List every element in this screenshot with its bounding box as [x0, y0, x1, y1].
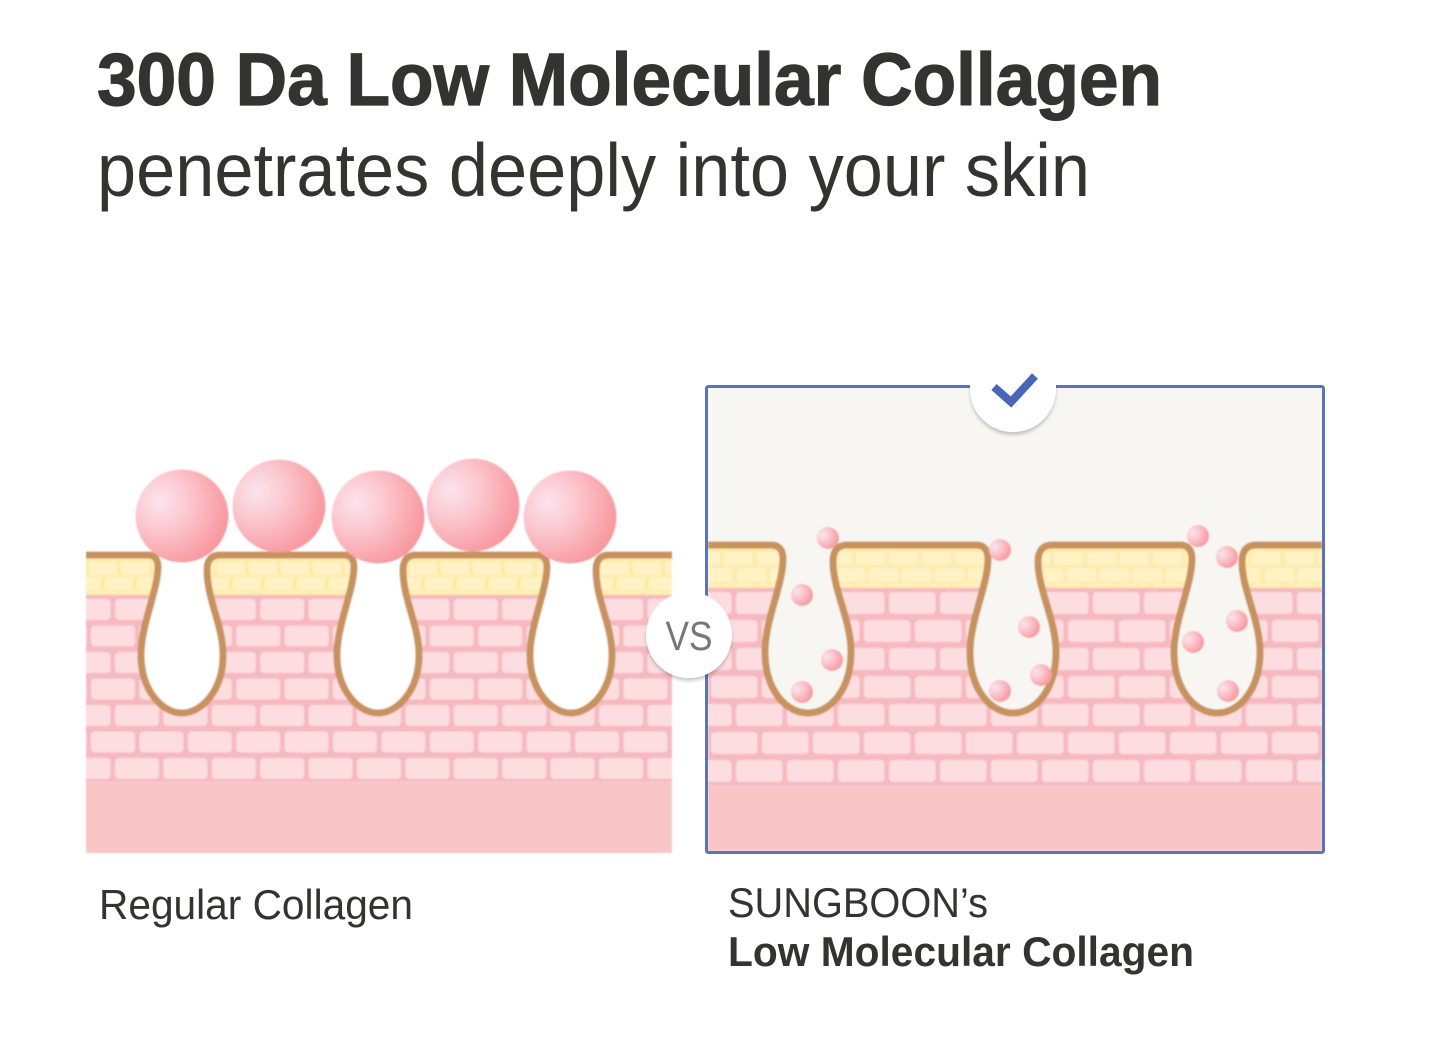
label line 2: Low Molecular Collagen [728, 928, 1194, 975]
title [97, 38, 1162, 212]
skin art [708, 450, 1322, 851]
badge circle top [970, 370, 1056, 389]
large collagen spheres [136, 458, 616, 564]
skin outline with three pores [708, 545, 1322, 713]
heading: regular line: penetrates deeply into your skin [97, 128, 1090, 212]
badge: VS [646, 592, 732, 678]
white area above skin and inside pores [86, 440, 672, 713]
skin outline with three pores [86, 555, 672, 713]
panel: regular collagen skin illustration [86, 440, 672, 853]
small collagen particles [791, 525, 1248, 703]
icon: check [994, 376, 1035, 402]
background above skin and inside pores [708, 450, 1322, 713]
VS text: VS [666, 613, 712, 659]
label line 1: SUNGBOON’s [728, 879, 988, 926]
badge: check mark [968, 373, 1058, 436]
heading: bold line: 300 Da Low Molecular Collagen [97, 38, 1162, 121]
badge circle shadow [968, 387, 1058, 436]
skin layer: solid dermis [708, 785, 1322, 851]
badge circle [646, 592, 732, 678]
skin layer: pink brick cells [86, 595, 672, 781]
label: regular collagen: Regular Collagen [99, 881, 413, 928]
skin layer: yellow top cells [86, 555, 672, 595]
skin layer: pink brick cells [708, 588, 1322, 785]
blue panel border [706, 386, 1324, 852]
panel background [707, 387, 1323, 852]
panel: low molecular collagen skin illustration [706, 386, 1324, 852]
skin layer: solid dermis [86, 781, 672, 853]
skin layer: yellow top cells [708, 545, 1322, 588]
label: SUNGBOON's low molecular collagen [728, 879, 1194, 975]
